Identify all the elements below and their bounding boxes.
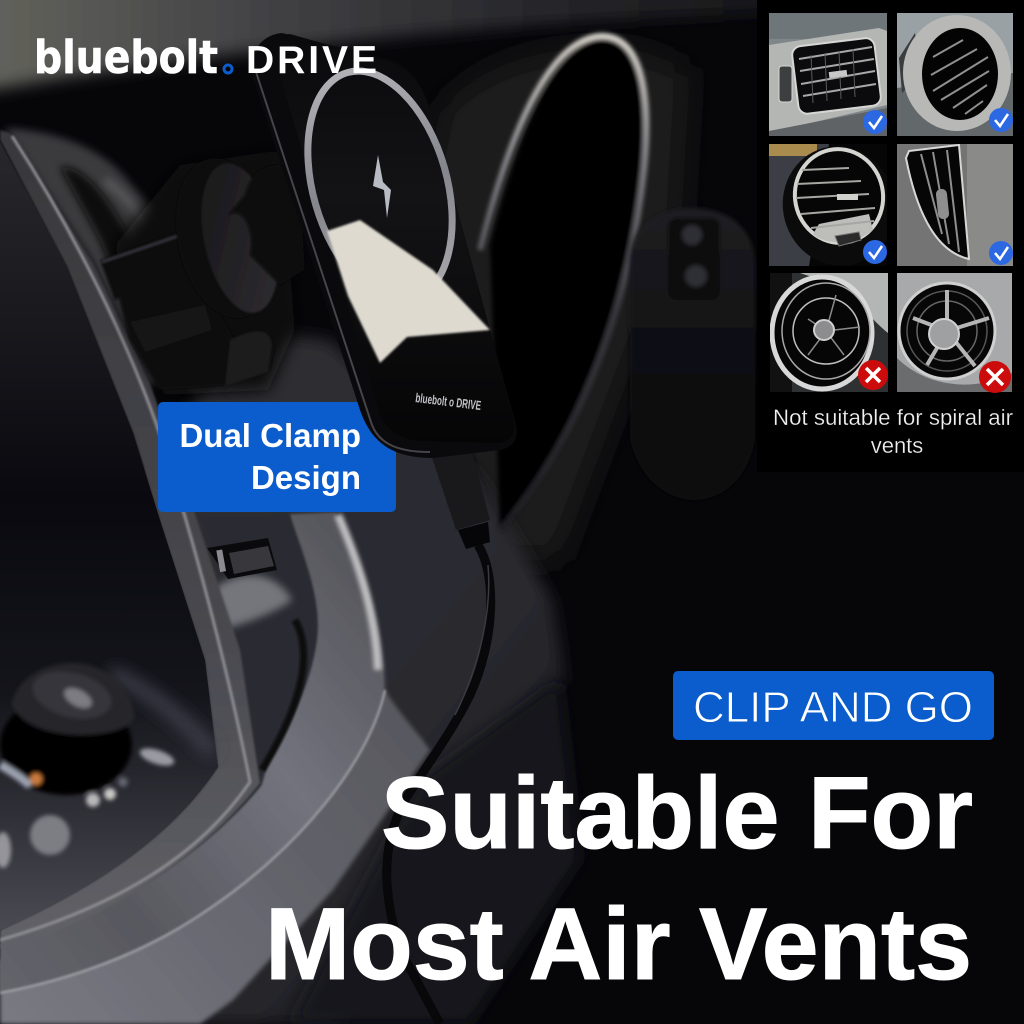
blurred upper dashboard band [0, 0, 800, 95]
charger front face [277, 34, 514, 443]
wordmark bluebolt: bluebolt [34, 31, 218, 84]
tag: clip and go: CLIP AND GO [693, 684, 973, 732]
thumbnail: oval vent [769, 144, 887, 266]
badge: cross [858, 360, 888, 390]
lower right console [290, 680, 580, 1024]
recess light patch [212, 575, 292, 628]
left dashboard screen and trim [0, 128, 430, 1024]
headline: Suitable For [381, 756, 973, 870]
upper trim shoulder [5, 128, 200, 390]
rotary knob [0, 663, 176, 868]
thumbnail: tall slim vent [897, 144, 1013, 266]
band divider sheen [0, 690, 385, 993]
callout label: dual clamp design: Dual Clamp [179, 417, 361, 454]
caption: not suitable: Not suitable for spiral air [773, 405, 1013, 430]
charger brand text: bluebolt o DRIVE [415, 390, 482, 413]
bright inner trim line [0, 136, 250, 940]
white reflection [327, 220, 490, 363]
badge: check [863, 240, 887, 264]
light vent slat [105, 180, 152, 240]
phone charger [252, 33, 517, 1024]
upper middle dashboard shading [400, 48, 690, 560]
wordmark drive: DRIVE [246, 39, 377, 82]
clamp arms [100, 232, 275, 390]
charger side sheen [256, 72, 430, 452]
far air vent silver arc [480, 36, 646, 530]
silver trim [0, 130, 260, 948]
lightning bolt [373, 155, 391, 218]
screen light streak [110, 673, 213, 753]
mount disc [162, 149, 291, 327]
headline [265, 756, 973, 1001]
tag: clip and go [673, 671, 994, 740]
thumbnail: spiral vent two [897, 273, 1012, 392]
brand logo [34, 31, 377, 84]
grey dashboard mass [0, 330, 565, 1024]
headline: Most Air Vents [265, 887, 972, 1001]
ball joint neck [228, 165, 305, 285]
blue bolt dot [224, 65, 232, 73]
vent opening [60, 167, 190, 400]
badge: check [863, 110, 887, 134]
recess outer dark curve [262, 620, 304, 770]
badge: check [989, 108, 1013, 132]
USB-C cable [387, 452, 491, 1024]
plug [432, 452, 490, 530]
badge: cross [979, 361, 1011, 393]
console recess [198, 515, 318, 775]
magnetic ring [283, 54, 477, 318]
thumbnail: spiral vent one [770, 273, 888, 392]
thumbnail: rectangular dash vent [769, 13, 887, 136]
screen glass [0, 142, 218, 930]
wide silver band inner [0, 513, 383, 992]
bright band highlight [338, 515, 378, 670]
thumbnail: round vent [897, 13, 1013, 136]
callout label: dual clamp design: Design [251, 459, 361, 496]
roller switch [207, 538, 277, 579]
cup holder cylinder [630, 208, 755, 500]
vent clip mount [100, 149, 305, 395]
callout box: dual clamp design [158, 402, 396, 512]
caption: not suitable: vents [871, 433, 923, 458]
wide silver band outer [0, 513, 430, 1024]
panel: air vent compatibility [757, 0, 1024, 472]
charger side edge [252, 33, 517, 458]
dark backdrop behind clamp [115, 150, 295, 395]
badge: check [989, 241, 1013, 265]
